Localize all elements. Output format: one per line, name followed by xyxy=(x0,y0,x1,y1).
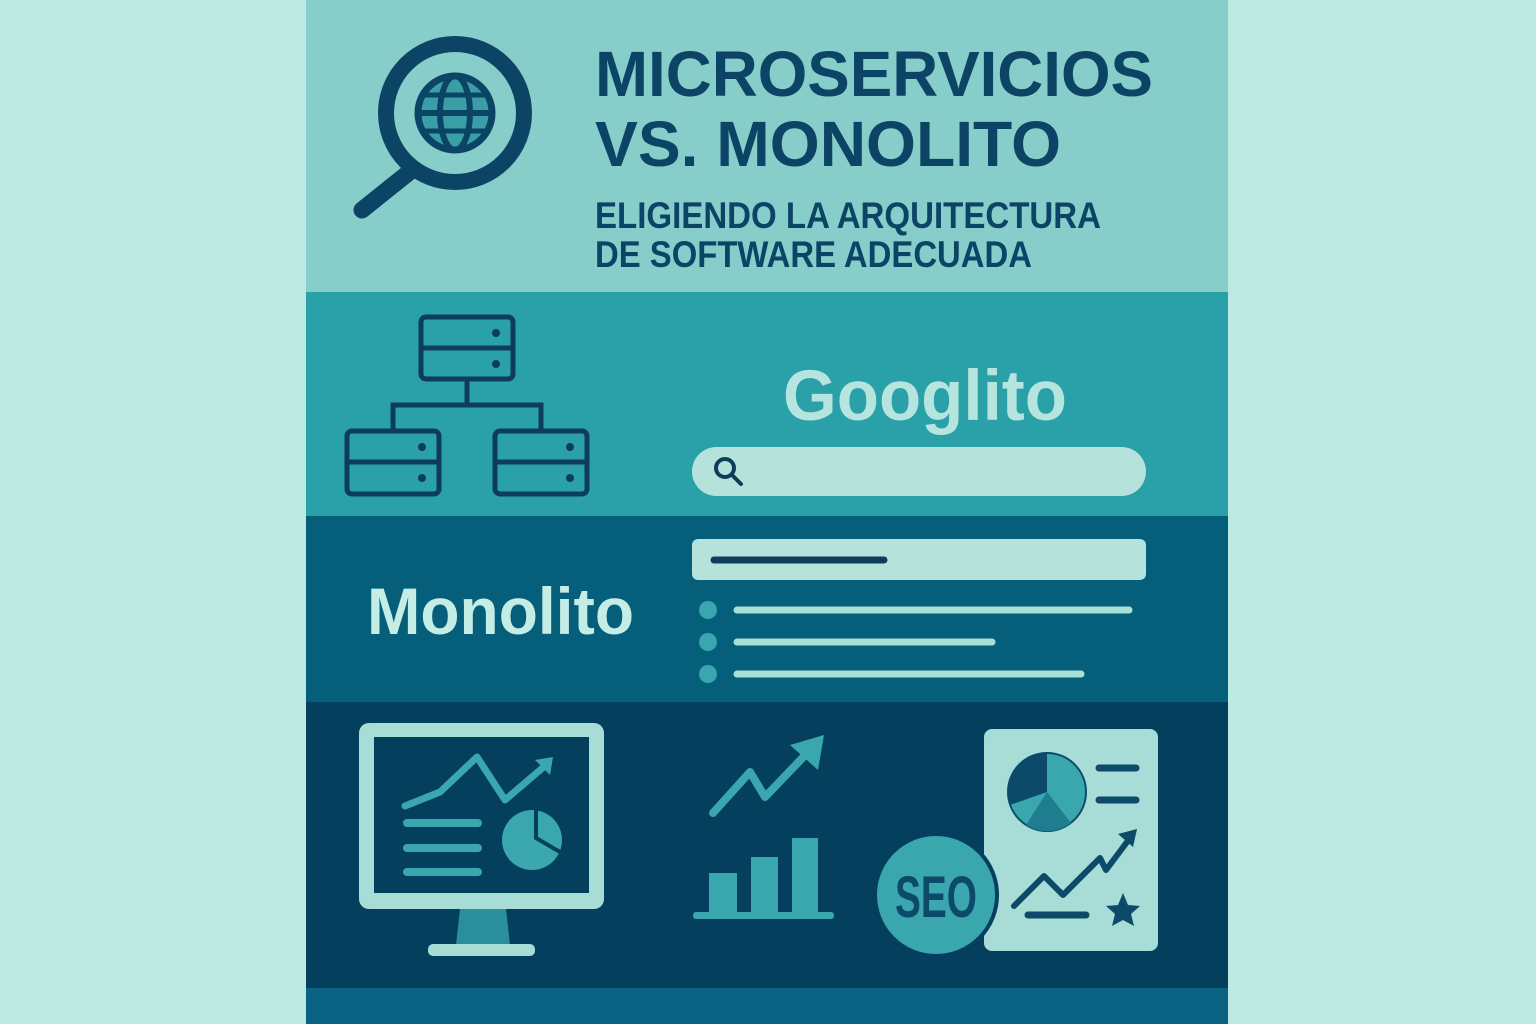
title: MICROSERVICIOS xyxy=(595,38,1153,110)
bullet list xyxy=(699,601,1129,683)
title xyxy=(595,38,1153,180)
subtitle: DE SOFTWARE ADECUADA xyxy=(595,234,1032,275)
result box xyxy=(692,539,1146,580)
icon: SEO badge: SEO xyxy=(895,865,977,930)
panel: monolito band xyxy=(306,516,1228,702)
panel: search band xyxy=(306,292,1228,516)
search bar xyxy=(692,447,1146,496)
panel: header xyxy=(306,0,1228,292)
icon: server hierarchy xyxy=(347,317,587,494)
subtitle: ELIGIENDO LA ARQUITECTURA xyxy=(595,195,1101,236)
icon: magnifier globe xyxy=(362,44,524,210)
icon: monitor xyxy=(359,723,604,956)
subtitle xyxy=(595,195,1101,275)
heading: Googlito: Googlito xyxy=(783,357,1067,436)
footer strip xyxy=(306,988,1228,1024)
panel: analytics xyxy=(306,702,1228,988)
heading: Monolito: Monolito xyxy=(367,574,634,648)
icon: SEO badge xyxy=(875,834,997,956)
title: VS. MONOLITO xyxy=(595,108,1061,180)
icon: growth chart xyxy=(693,735,834,919)
icon: report document xyxy=(984,729,1158,951)
